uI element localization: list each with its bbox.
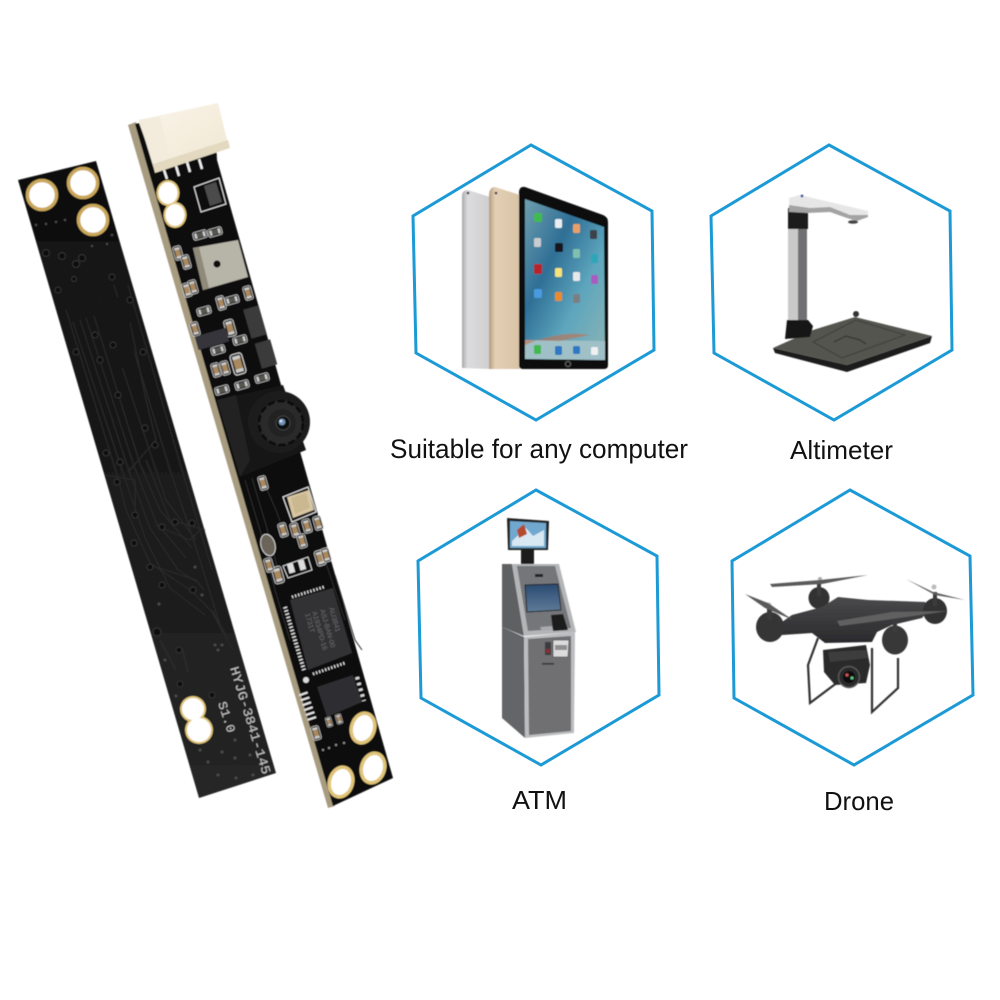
copper traces [66,285,233,672]
right motor [923,598,947,624]
label: altimeter: Altimeter [790,435,893,465]
traces near camera [245,478,362,650]
tablet screen [525,199,605,360]
rear motor [808,587,830,609]
camera lens [838,666,860,688]
base plate side [773,336,932,372]
collar [788,208,808,229]
pad pair [283,557,312,578]
lower body front trim [524,632,575,738]
PCB front side (right board) [128,103,393,808]
base plate top [773,317,932,365]
main controller chip [285,587,352,674]
main controller chip: A1934PD-16 [310,611,328,651]
gold pad 3 [78,206,108,234]
hexagon panel: computer [413,145,654,420]
board edge strip [128,122,335,808]
ATM screen [525,584,561,612]
gimbal [823,645,870,685]
front propeller [837,611,948,626]
rear propeller [770,575,868,587]
lens holder [248,391,310,453]
hexagon outline [413,145,654,420]
lower body side [502,627,525,738]
card slot [535,574,543,577]
hexagon panel: drone [732,490,973,765]
lower body panel [528,636,571,735]
lens glass [276,416,290,430]
front tablet [519,187,608,369]
hexagon panel: ATM [418,490,659,765]
upper body side [502,564,524,636]
app icons [534,213,598,355]
connector socket [138,103,230,179]
brand [542,663,554,665]
resistors and capacitors lower [257,475,343,741]
main controller chip: ASJ-BAN-00 [318,609,336,649]
gold pad 3 [326,764,356,800]
gold mounting slot [180,696,213,744]
small test dots [35,219,254,780]
label: drone: Drone [824,786,894,816]
label: ATM: ATM [512,785,567,815]
keypad module [551,614,568,631]
hexagon outline [711,145,952,420]
gold pad 1 [28,180,56,210]
document stand illustration [773,195,932,372]
main controller chip: 1731T [303,613,315,634]
vias [42,250,215,698]
board face [135,105,393,806]
microphone shield [193,240,248,290]
ATM illustration [502,518,576,738]
drone illustration [745,575,965,712]
right propeller [906,579,965,600]
board body [18,161,276,798]
body [782,597,930,643]
upper body front [512,564,576,636]
crystal oscillator [283,487,316,522]
left motor [756,612,784,642]
silkscreen version: S1.0 [214,700,237,735]
lens gear ring [259,401,303,445]
hexagon outline [418,490,659,765]
silver tablet [462,190,490,369]
label: computer: Suitable for any computer [390,434,688,464]
tablets illustration [462,187,608,369]
home button [565,361,571,367]
column [788,228,798,320]
hexagon panel: altimeter [711,145,952,420]
arm [789,195,868,215]
gold tablet [489,187,520,369]
silkscreen part number: HYJG-3841-145 [226,665,273,776]
left propeller [745,594,793,620]
chip pins [285,587,345,674]
small dots [303,677,345,751]
base block [785,320,813,339]
solid copper fill area [100,296,136,370]
dark inductor chips [195,305,277,369]
resistors and capacitors upper [172,226,270,396]
printer slot [553,640,569,657]
landing legs [808,638,898,712]
electrolytic capacitor [258,532,278,558]
gold pad 1 [348,710,378,746]
front motor [882,626,908,654]
top chip [194,178,226,212]
gold pad 2 [68,168,98,198]
PCB back side (left board) [18,161,276,798]
camera module [217,385,310,477]
hexagon outline [732,490,973,765]
monitor stand [521,550,534,564]
chip marking: AU3841 [327,607,341,633]
flash memory chip [303,675,364,722]
connector pins [164,159,202,179]
gold pad 2 [358,750,388,786]
card reader [545,642,551,655]
gold mounting slot [156,180,186,228]
monitor [507,518,549,550]
